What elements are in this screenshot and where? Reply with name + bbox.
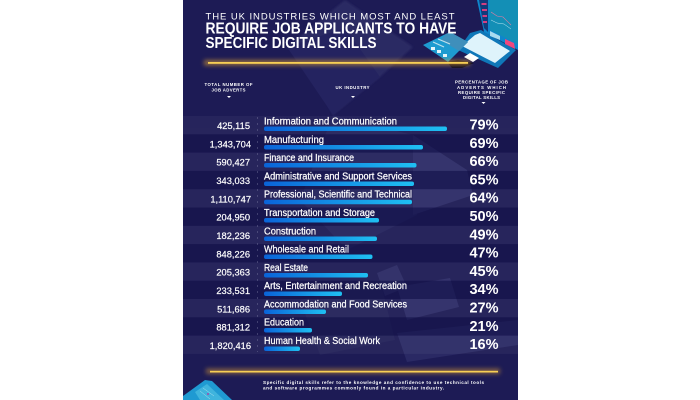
column header: total number of job adverts (204, 82, 253, 98)
table: advert counts: 590,427 (216, 158, 250, 168)
bar chart: industries (264, 116, 447, 351)
title: REQUIRE JOB APPLICANTS TO HAVE (206, 20, 456, 38)
column header: total number of job adverts: JOB ADVERTS (212, 88, 246, 92)
table: percentages: 45% (469, 264, 499, 280)
title: SPECIFIC DIGITAL SKILLS (206, 35, 376, 52)
column header: percentage: REQUIRE SPECIFIC (458, 90, 505, 95)
column separator (256, 117, 258, 352)
table: advert counts: 1,820,416 (210, 341, 251, 351)
table: percentages: 47% (469, 246, 499, 262)
bar chart: industries: Arts, Entertainment and Recreation (264, 281, 407, 292)
column header: total number of job adverts: TOTAL NUMBER OF (204, 82, 253, 87)
bar chart: industries: Accommodation and Food Services (264, 300, 407, 310)
footnote: Specific digital skills refer to the knowledge and confidence to use technical tools (263, 380, 484, 385)
table: percentages: 49% (469, 228, 499, 244)
table: percentages: 66% (469, 154, 499, 170)
bar chart: industries: Manufacturing (264, 135, 324, 146)
table: advert counts: 233,531 (216, 286, 250, 296)
column header: percentage: DIGITAL SKILLS (463, 95, 500, 100)
bar chart: industries: Education (264, 318, 304, 328)
table: percentages: 27% (469, 300, 499, 316)
panel: background (183, 0, 518, 400)
table: percentages: 69% (469, 136, 499, 152)
table row stripes (183, 116, 518, 354)
table: percentages: 50% (469, 209, 499, 225)
table: advert counts: 848,226 (216, 250, 250, 260)
table: advert counts: 425,115 (217, 121, 250, 131)
table: advert counts (210, 121, 251, 351)
column header: percentage: ADVERTS WHICH (457, 85, 506, 90)
icon: laptop and tablet (423, 0, 518, 68)
table: advert counts: 343,033 (216, 176, 250, 186)
footnote: and software programmes commonly found in a particular industry. (263, 385, 444, 390)
column header: UK industry: UK INDUSTRY (336, 85, 370, 90)
column header: percentage: PERCENTAGE OF JOB (455, 80, 508, 84)
bar chart: industries: Finance and Insurance (264, 153, 354, 164)
bar chart: industries: Information and Communication (264, 116, 397, 128)
bar chart: industries: Real Estate (264, 263, 308, 274)
bar chart: industries: Human Health & Social Work (264, 336, 381, 347)
table: percentages (469, 118, 499, 353)
bar chart: industries: Construction (264, 226, 316, 238)
top glowing divider (204, 60, 470, 66)
bar chart: industries: Transportation and Storage (264, 208, 375, 219)
table: percentages: 79% (469, 118, 499, 134)
table: percentages: 34% (469, 282, 499, 298)
table: advert counts: 1,110,747 (210, 194, 251, 204)
table: percentages: 21% (469, 319, 499, 335)
table: advert counts: 881,312 (216, 322, 250, 332)
icon: tablet bottom left (183, 380, 232, 400)
column header: UK industry (336, 85, 370, 98)
table: advert counts: 1,343,704 (210, 140, 251, 150)
table: percentages: 64% (469, 191, 499, 207)
table: advert counts: 205,363 (216, 268, 250, 278)
column header: percentage (455, 80, 508, 104)
table: percentages: 65% (469, 172, 499, 188)
bar chart: industries: Professional, Scientific and Technical (264, 190, 412, 200)
table: advert counts: 182,236 (216, 231, 250, 241)
table: advert counts: 204,950 (216, 212, 250, 222)
bar chart: industries: Wholesale and Retail (264, 244, 349, 256)
title (206, 12, 456, 52)
title: THE UK INDUSTRIES WHICH MOST AND LEAST (206, 12, 455, 22)
table: percentages: 16% (469, 337, 499, 353)
table: advert counts: 511,686 (217, 304, 250, 314)
footnote (263, 380, 484, 390)
bottom glowing divider (206, 368, 500, 374)
bar chart: industries: Administrative and Support Services (264, 171, 412, 182)
